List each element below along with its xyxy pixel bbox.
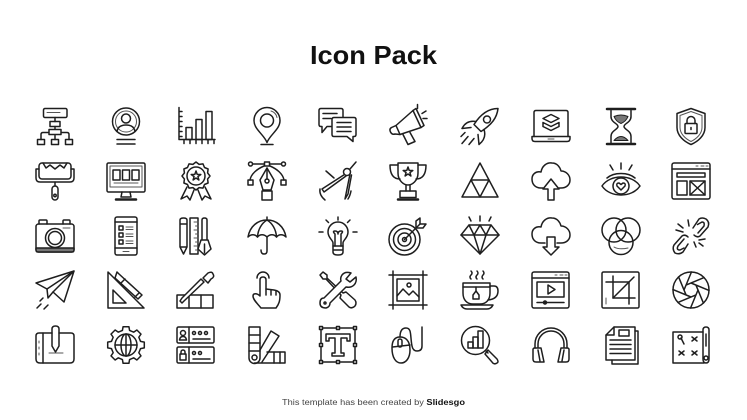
icon: venn diagram [602,218,640,254]
icon: documents [606,327,638,364]
icon: pen tool [248,162,286,200]
icon: map pin [254,108,280,144]
icon: award rosette [181,162,211,200]
icon: headphones [533,328,569,362]
icon: paint roller [36,163,74,200]
icon: login panels [177,327,214,363]
icon: megaphone [390,104,427,144]
icon: video player window [532,272,569,308]
icon: diamond [461,216,499,254]
icon: desktop monitor [107,163,145,200]
title: Icon Pack [310,40,438,70]
icon: treasure map [673,327,709,363]
footer credit: This template has been created by Slidesgo [282,397,465,407]
icon: eye with heart [602,163,640,195]
icon: color swatches [249,327,285,364]
icon: user profile badge [112,108,140,144]
icon: magnifier with chart [462,326,498,364]
icon: wrench and screwdriver [320,272,356,308]
icon: rocket [461,108,498,144]
icon: umbrella [248,217,286,254]
icon: org chart [38,108,72,144]
icon: camera aperture [673,272,709,308]
icon: bar chart [179,108,215,144]
icon: text box T [320,326,356,364]
icon: smartphone checklist [115,217,137,255]
icon: cloud download [532,218,570,255]
icon: triangle pyramid [462,163,498,197]
icon: chat bubbles [319,108,356,142]
icon: laptop with layers [532,110,570,142]
icon: crop tool [602,272,639,308]
icon: graphics tablet with stylus [36,326,74,363]
icon: color dropper [177,272,214,308]
icon: target with arrow [389,218,426,255]
icon: security shield [677,108,705,144]
icon: computer mouse [392,327,422,363]
icon: browser layout [672,163,710,199]
icon: cloud upload [532,163,570,200]
icon: camera [36,220,74,252]
icon: broken chain link [673,218,709,254]
icon: pointing hand [253,272,280,308]
icon: hourglass [607,109,635,144]
icon: pencil ruler and pen [180,218,211,255]
icon: light bulb [319,217,357,255]
icon: trophy [390,163,426,200]
icon: set square with pencil [108,272,144,308]
icon: drawing compass [320,162,356,200]
icon: gear with globe [108,327,144,363]
icon: framed landscape picture [389,271,427,309]
icon: tea cup [461,271,498,309]
icon: paper plane [36,271,74,309]
